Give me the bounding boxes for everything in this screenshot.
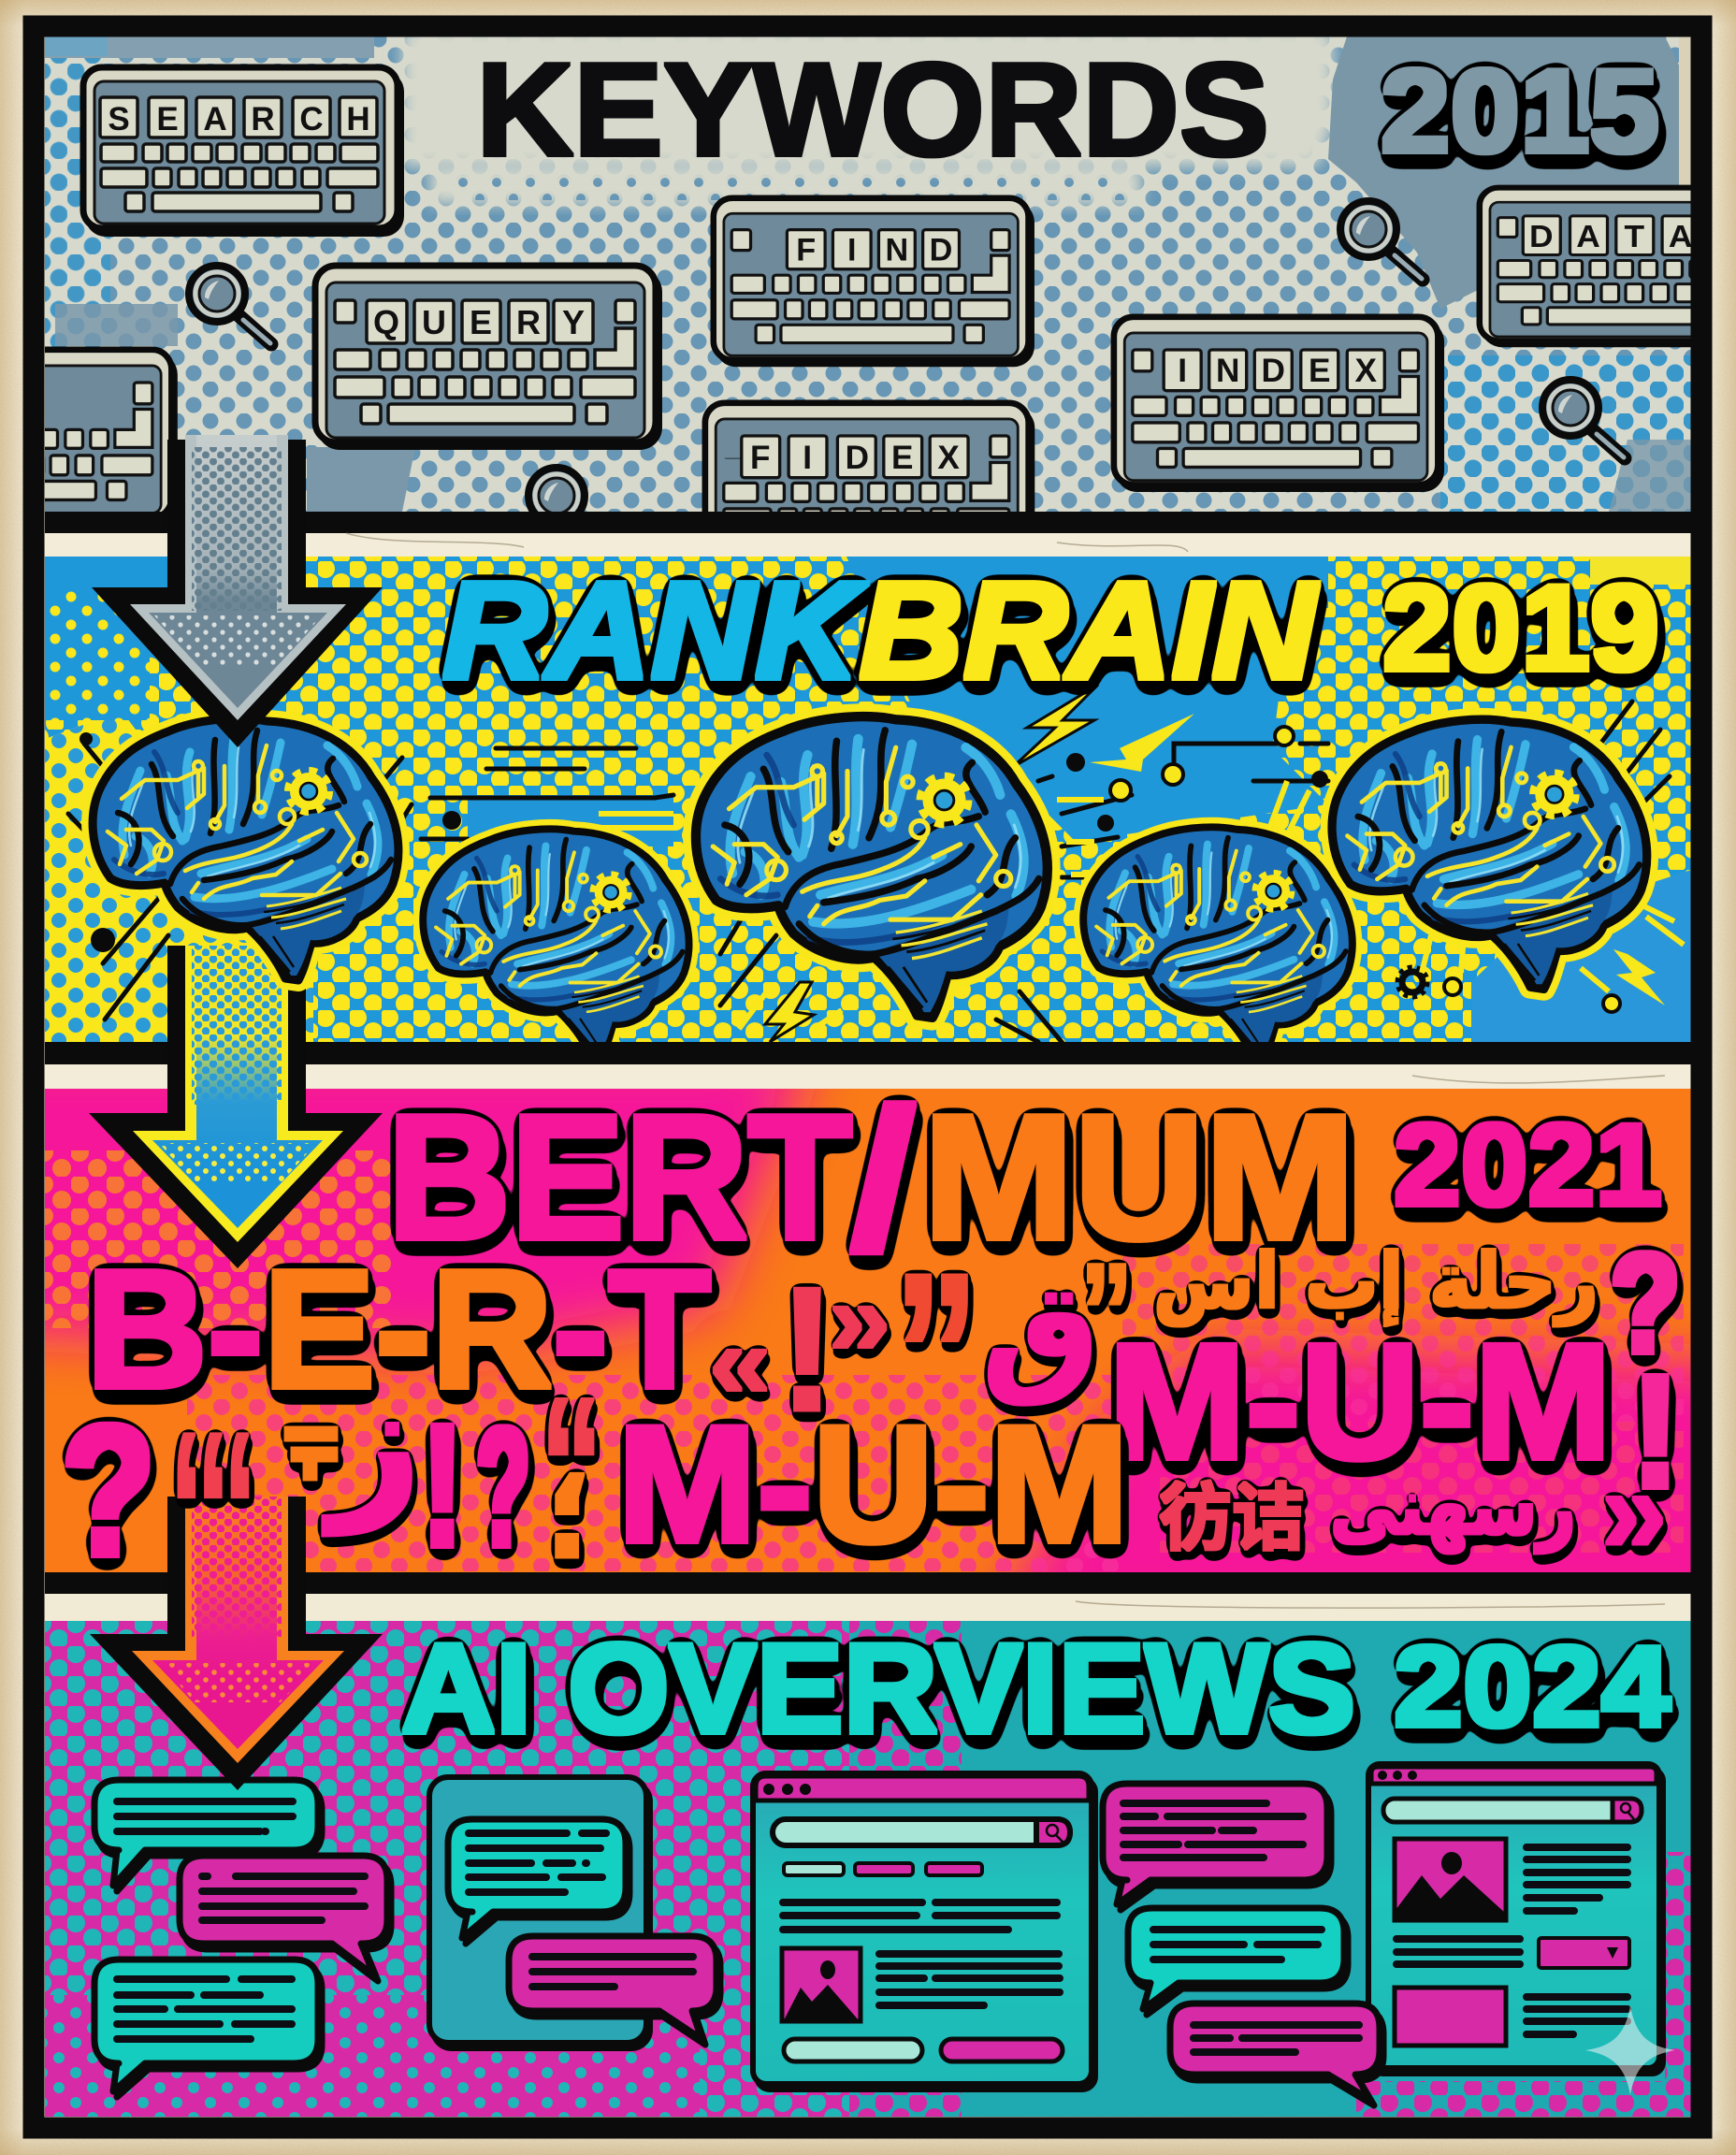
text: guillemets and exclamation: ” — [893, 1224, 979, 1485]
keyboard: QUERY — [315, 266, 662, 450]
chinese text: 彷诘 — [1159, 1460, 1305, 1565]
icon: sparkle watermark — [1585, 2005, 1675, 2095]
arrow 1: keywords to rankbrain — [92, 435, 383, 747]
brain 5 — [1332, 719, 1647, 989]
panel: keywords 2015 — [45, 37, 1691, 512]
exclamation and question — [423, 1390, 529, 1583]
phone card — [429, 1777, 646, 2043]
keyboard: FIND: FIND — [796, 233, 952, 268]
text: guillemets and exclamation — [709, 1224, 1133, 1485]
arabic letter: ق — [982, 1256, 1099, 1409]
keyboard: INDEX: INDEX — [1178, 353, 1378, 389]
keyboard: QUERY: QUERY — [373, 303, 585, 341]
chat bubble 6 — [1103, 1784, 1327, 1904]
icon: lightning bolt lower — [765, 982, 814, 1042]
year: 2015: 2015 — [1381, 45, 1659, 177]
quote and semicolon: ؛ — [544, 1444, 593, 1586]
chat bubble 7 — [1128, 1908, 1344, 2009]
keyboard: FIDEX: FIDEX — [750, 440, 960, 476]
brain 3 — [696, 716, 1048, 1018]
exclamation and question: ! — [423, 1390, 462, 1583]
chat bubble 2 — [180, 1856, 387, 1975]
arabic letter zay: ز — [322, 1347, 422, 1536]
keyboard: FIND — [714, 198, 1034, 367]
chat bubble 8 — [1170, 2003, 1380, 2100]
chat bubble 1 — [94, 1780, 318, 1886]
year: 2024: 2024 — [1394, 1623, 1671, 1750]
panel: bert mum 2021 background — [0, 1048, 1736, 1627]
title: BERT/MUM: MUM — [923, 1078, 1355, 1277]
brain 2 — [423, 829, 689, 1057]
browser window 1 — [753, 1773, 1092, 2084]
keyboard: SEARCH: SEARCH — [108, 101, 370, 137]
chat bubble 3 — [94, 1960, 318, 2091]
icon: gear small — [1397, 967, 1427, 997]
year: 2019: 2019 — [1382, 559, 1659, 696]
icon: lightning bolt large — [1013, 685, 1098, 767]
infographic poster: ‘‘‘ — [171, 1385, 255, 1636]
arabic text line 2: رسهنى — [1330, 1460, 1576, 1554]
chat bubble 4 — [448, 1819, 626, 1938]
chat bubble 5 — [509, 1936, 716, 2039]
icon: magnifier lower right — [1542, 380, 1625, 458]
title: BERT/MUM — [387, 1066, 1355, 1292]
text: guillemets and exclamation: « — [709, 1305, 771, 1420]
arrow 2: rankbrain to bert — [89, 946, 383, 1268]
glyph block — [285, 1427, 337, 1480]
text: M-U-M upper: M-U-M — [1108, 1310, 1612, 1494]
icon: lightning bolt small — [1090, 714, 1194, 772]
exclamation right: ! — [1632, 1343, 1679, 1521]
keyboard: INDEX — [1114, 317, 1444, 492]
exclamation and question: ? — [477, 1394, 529, 1582]
question mark left: ? — [62, 1387, 155, 1594]
text: guillemets and exclamation: ” — [1080, 1234, 1133, 1391]
brain 4 — [1083, 827, 1353, 1058]
icon: magnifier right of FIND — [1340, 201, 1423, 280]
quote and semicolon: “ — [541, 1356, 602, 1576]
title: AI OVERVIEWS: AI OVERVIEWS — [401, 1617, 1355, 1759]
keyboard: DATA — [1476, 185, 1691, 348]
panel: rankbrain 2019 background — [45, 557, 1691, 1048]
guillemet bottom right: » — [1601, 1442, 1667, 1579]
question mark top right: ? — [1611, 1224, 1680, 1381]
arrow 3: bert to ai overviews — [90, 1497, 383, 1790]
icon: lightning bolt right — [1613, 949, 1665, 1005]
text: guillemets and exclamation: ! — [778, 1251, 836, 1449]
icon: magnifier — [189, 266, 271, 344]
arabic text line 1: رحلة إب اس — [1153, 1237, 1599, 1327]
browser window 2 — [1368, 1764, 1659, 2068]
title: RANKBRAIN: RANKBRAIN — [442, 554, 1319, 708]
keyboard: partial left — [0, 350, 178, 525]
text: B-E-R-T: B-E-R-T — [86, 1236, 711, 1424]
keyboard: SEARCH — [83, 67, 404, 237]
title: KEYWORDS: KEYWORDS — [476, 36, 1269, 184]
text: guillemets and exclamation: » — [829, 1262, 890, 1377]
title: BERT/MUM: / — [849, 1066, 917, 1292]
keyboard: DATA: DATA — [1529, 220, 1692, 254]
quote and semicolon — [541, 1356, 602, 1586]
year: 2021: 2021 — [1394, 1101, 1662, 1230]
icon: magnifier cut off — [528, 468, 611, 546]
brain 1 — [93, 718, 398, 980]
brains — [93, 716, 1647, 1058]
keyboard: FIDEX — [702, 400, 1034, 512]
panel: ai overviews 2024 background and cards — [45, 1621, 1691, 2117]
text: M-U-M lower: M-U-M — [617, 1391, 1129, 1577]
title: BERT/MUM: BERT — [387, 1078, 852, 1277]
